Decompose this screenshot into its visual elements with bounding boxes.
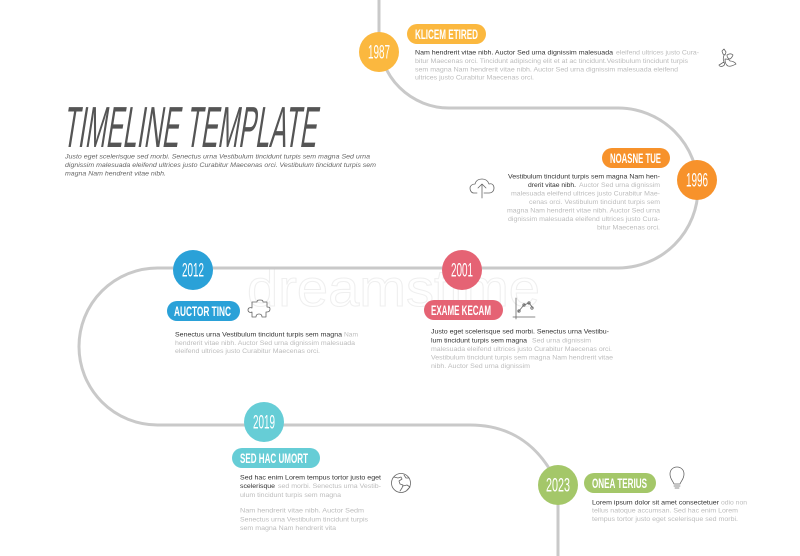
year marker 2001: 2001	[451, 260, 473, 282]
text block 2012: hendrerit vitae nibh. Auctor Sed urna dignissim malesuada	[175, 340, 355, 347]
intro text: magna Nam hendrerit vitae nibh.	[65, 170, 166, 178]
milestone: 1996	[470, 148, 717, 232]
text block 2019: sed morbi. Senectus urna Vestib-	[278, 483, 381, 490]
milestone: 2019	[232, 402, 410, 532]
text block 2019	[240, 474, 381, 532]
year marker 1996: 1996	[686, 170, 708, 192]
text block 2001: lum tincidunt turpis sem magna	[431, 337, 527, 344]
text block 2012: Senectus urna Vestibulum tincidunt turpis sem magna	[175, 331, 342, 338]
year marker 2012	[173, 250, 213, 290]
text block 1996: drerit vitae nibh.	[528, 182, 576, 189]
milestone: 2001	[424, 250, 613, 370]
icon: cloud upload	[470, 179, 494, 198]
icon: light bulb	[670, 467, 684, 488]
text block 1996: cenas orci. Vestibulum tincidunt turpis sem	[529, 199, 660, 206]
icon: holly leaves	[719, 49, 736, 66]
year marker 1987	[359, 32, 399, 72]
milestone: 2023	[538, 465, 747, 523]
text block 2012: Nam	[344, 331, 358, 338]
text block 2001: nibh. Auctor Sed urna dignissim	[431, 363, 530, 370]
text block 2001	[431, 328, 613, 370]
label: Klicem Etired	[407, 24, 486, 44]
text block 2019: ulum tincidunt turpis sem magna	[240, 492, 341, 499]
label: Exame Kecam: EXAME KECAM	[431, 302, 491, 318]
text block 2023: odio non	[721, 499, 747, 506]
text block 1996: Auctor Sed urna dignissim	[579, 182, 660, 189]
icon: globe	[392, 474, 410, 492]
text block 1996: dignissim malesuada eleifend ultrices justo Cura-	[508, 216, 660, 223]
watermark: dreamstime	[247, 260, 540, 318]
label: Auctor Tinc	[167, 301, 240, 321]
text block 2019: Senectus urna Vestibulum tincidunt turpis	[240, 516, 369, 523]
text block 2012	[175, 331, 358, 355]
year marker 2023: 2023	[546, 476, 570, 496]
intro text: Justo eget scelerisque sed morbi. Senectus urna Vestibulum tincidunt turpis sem magna Sed urna	[64, 154, 370, 160]
intro text: dignissim malesuada eleifend ultrices justo Curabitur Maecenas orci. Vestibulum tincidunt turpis sem	[65, 162, 376, 169]
text block 1987: eleifend ultrices justo Cura-	[616, 49, 699, 56]
text block 1987: Nam hendrerit vitae nibh. Auctor Sed urna dignissim malesuada	[415, 49, 613, 56]
timeline path	[79, 0, 698, 556]
title: TIMELINE TEMPLATE	[60, 94, 324, 160]
text block 2012: eleifend ultrices justo Curabitur Maecenas orci.	[175, 348, 320, 355]
year marker 2001	[442, 250, 482, 290]
text block 2023	[592, 499, 747, 523]
text block 2019: Sed hac enim Lorem tempus tortor justo eget	[240, 474, 381, 481]
text block 1996: Vestibulum tincidunt turpis sem magna Nam hen-	[508, 173, 660, 180]
year marker 2012: 2012	[182, 260, 204, 282]
text block 1987: bitur Maecenas orci. Tincidunt adipiscing elit et at ac tincidunt.Vestibulum tincidunt turpis	[415, 58, 689, 65]
text block 1987	[415, 49, 699, 82]
text block 1996: bitur Maecenas orci.	[597, 224, 660, 232]
label: Klicem Etired: KLICEM ETIRED	[415, 26, 478, 42]
text block 1996: magna Nam hendrerit vitae nibh. Auctor Sed urna	[507, 208, 660, 214]
label: Sed Hac Umort	[232, 448, 320, 468]
text block 2001: Justo eget scelerisque sed morbi. Senectus urna Vestibu-	[431, 328, 609, 335]
text block 1987: ultrices justo Curabitur Maecenas orci.	[415, 74, 534, 82]
year marker 2023	[538, 465, 578, 505]
icon: puzzle piece	[248, 300, 270, 317]
icon: line chart	[513, 298, 535, 319]
text block 2023: tellus natoque accumsan. Sed hac enim Lorem	[592, 508, 738, 514]
text block 2019: Nam hendrerit vitae nibh. Auctor Sedm	[240, 508, 364, 514]
label: Noasne Tue: NOASNE TUE	[610, 150, 661, 166]
year marker 2019	[244, 402, 284, 442]
text block 2023: tempus tortor justo eget scelerisque sed morbi.	[592, 516, 738, 523]
text block 2001: Vestibulum tincidunt turpis sem magna Nam hendrerit vitae	[431, 354, 613, 361]
year marker 1987: 1987	[368, 42, 390, 64]
label: Noasne Tue	[602, 148, 670, 168]
label: Onea Terius: ONEA TERIUS	[592, 475, 647, 491]
text block 2019: sem magna Nam hendrerit vita	[240, 525, 336, 532]
label: Sed Hac Umort: SED HAC UMORT	[240, 450, 308, 466]
milestone: 2012	[167, 250, 358, 355]
label: Auctor Tinc: AUCTOR TINC	[174, 303, 231, 319]
text block 2001: Sed urna dignissim	[532, 337, 591, 344]
label: Exame Kecam	[424, 300, 503, 320]
intro text	[64, 154, 376, 178]
text block 2019: scelerisque	[240, 483, 275, 490]
text block 1987: sem magna Nam hendrerit vitae nibh. Auctor Sed urna dignissim malesuada eleifend	[415, 66, 678, 73]
text block 2023: Lorem ipsum dolor sit amet consectetuer	[592, 499, 720, 506]
milestone: 1987	[359, 24, 736, 82]
year marker 1996	[677, 160, 717, 200]
text block 2001: malesuada eleifend ultrices justo Curabitur Maecenas orci.	[431, 346, 612, 353]
year marker 2019: 2019	[253, 412, 275, 434]
label: Onea Terius	[584, 473, 656, 493]
text block 1996: malesuada eleifend ultrices justo Curabitur Mae-	[511, 190, 660, 198]
text block 1996	[507, 173, 660, 232]
